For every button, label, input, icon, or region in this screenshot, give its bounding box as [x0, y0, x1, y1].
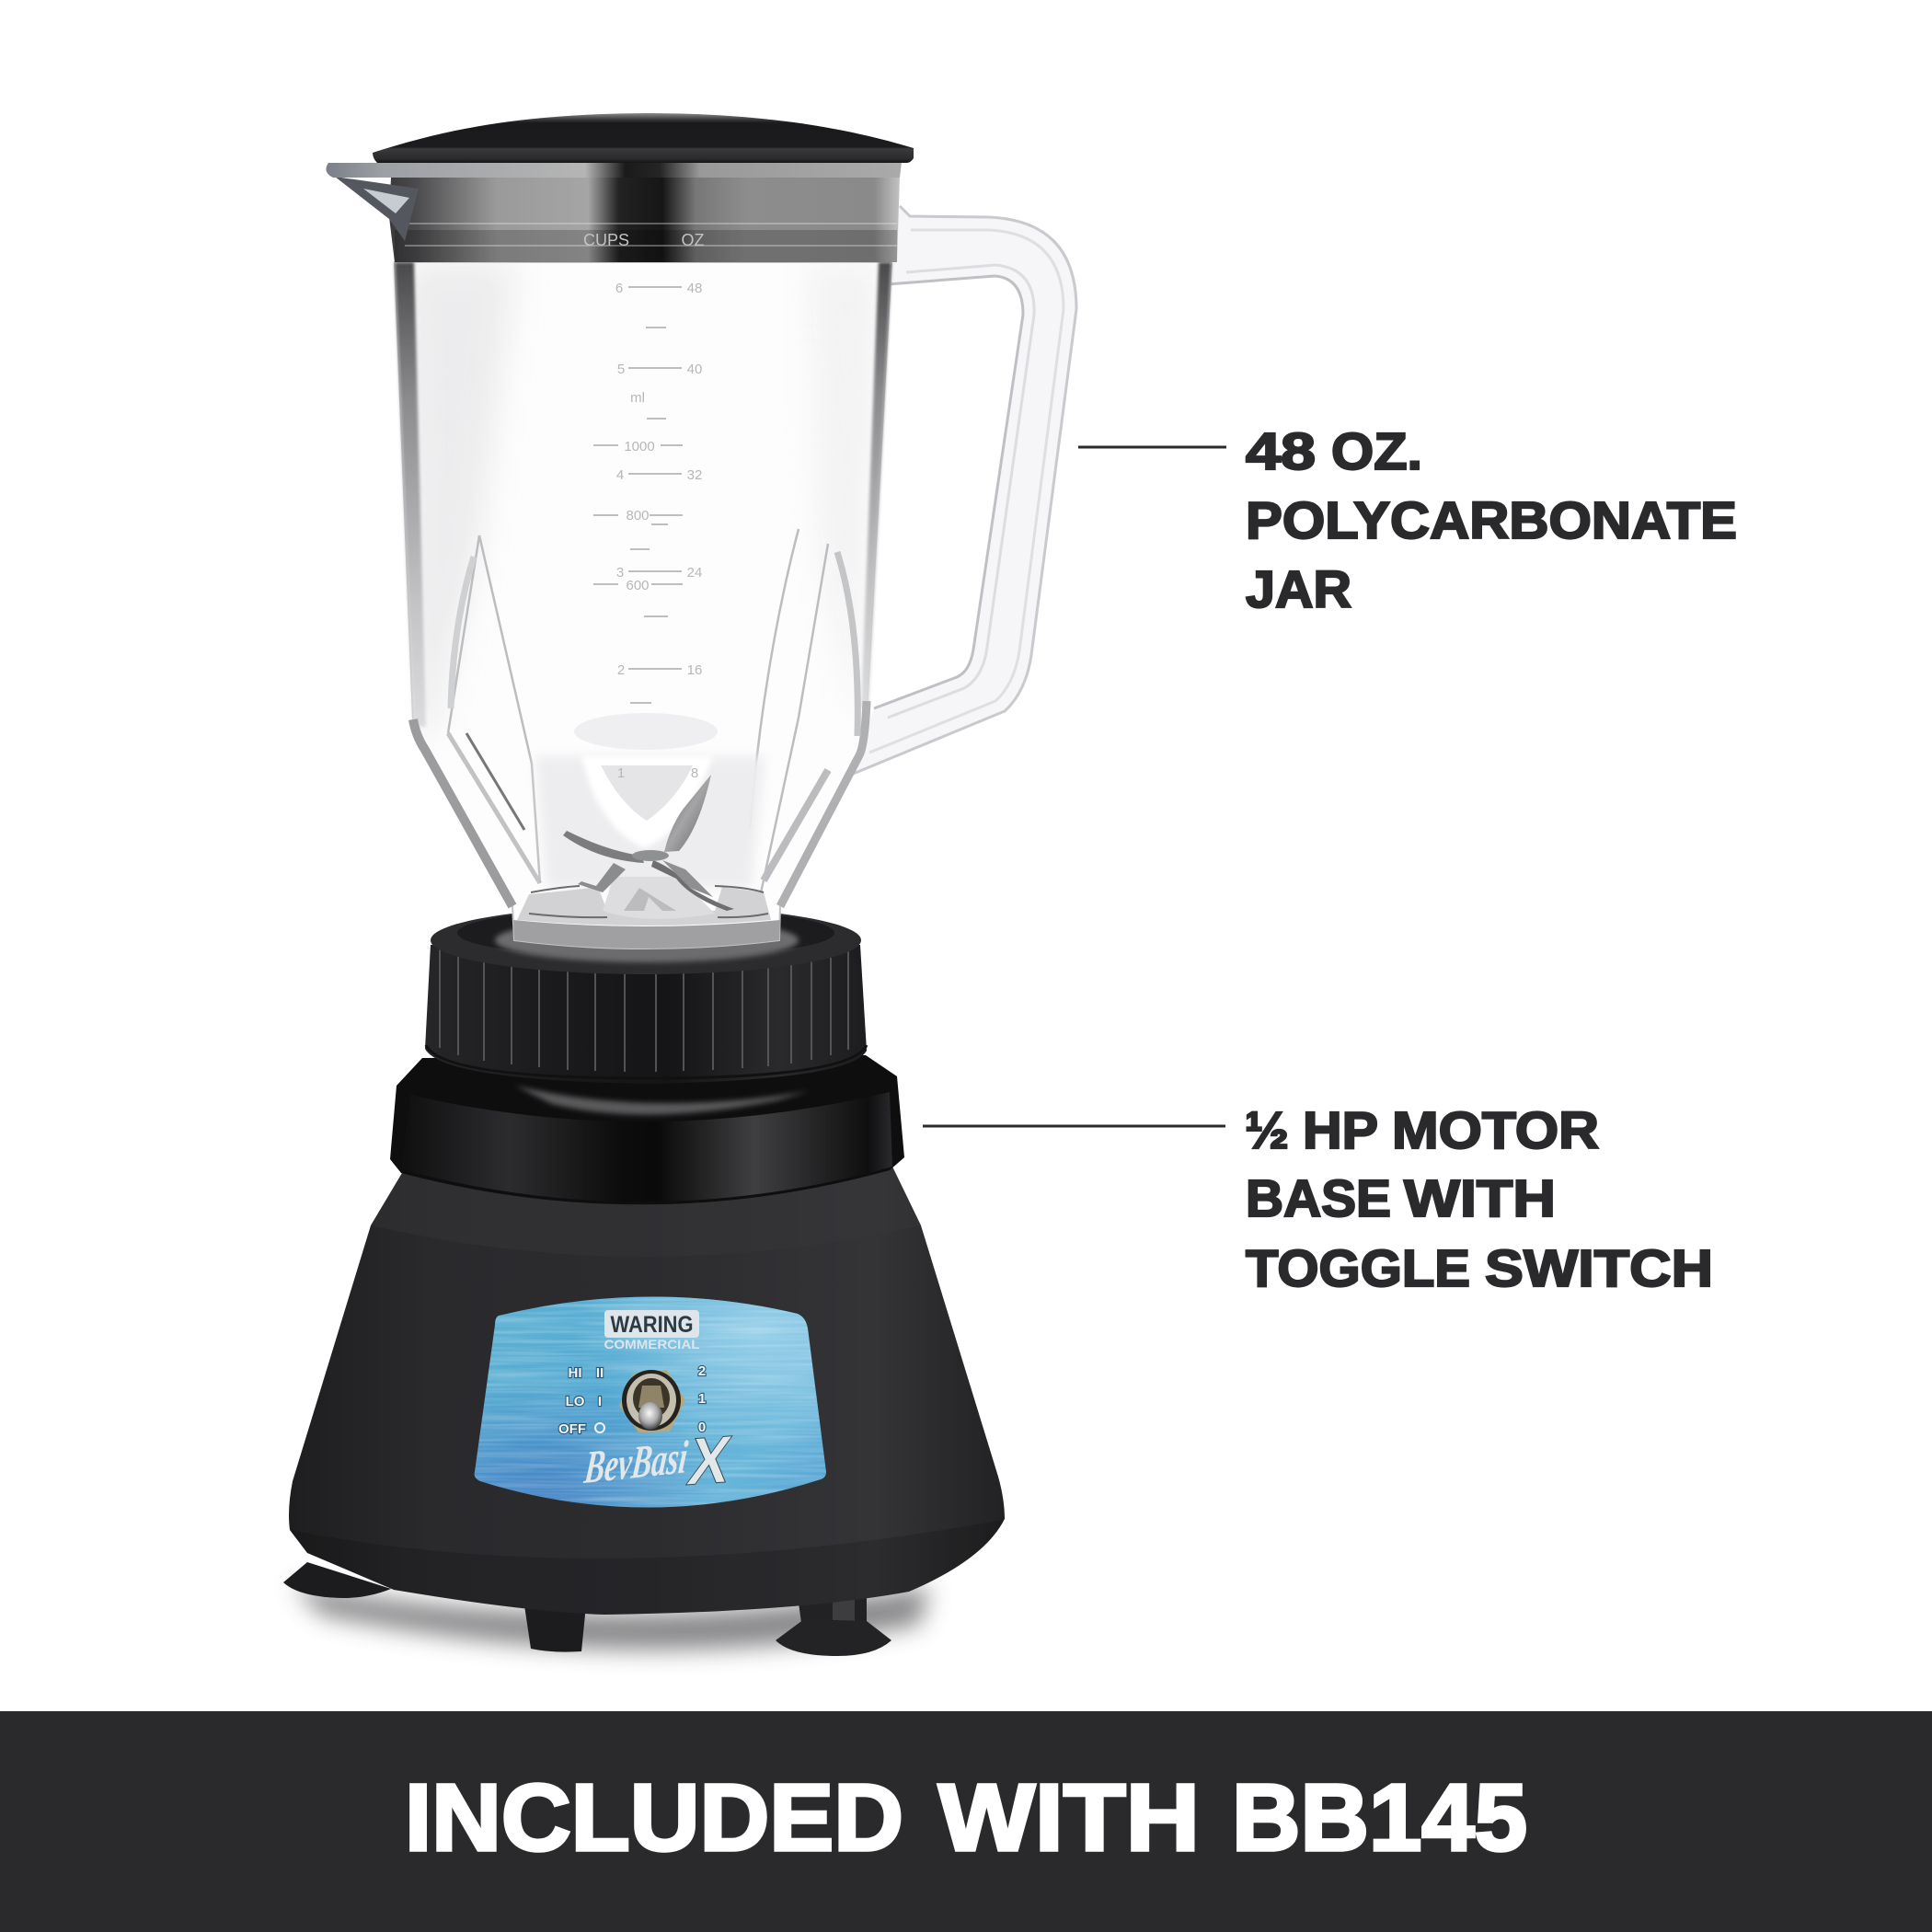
label: half HP motor base with toggle switch: WITH: [1404, 1169, 1556, 1228]
measurement scale: 24: [687, 565, 702, 581]
toggle switch: [619, 1370, 685, 1432]
measurement scale: [583, 231, 705, 772]
label: half HP motor base with toggle switch: BASE: [1246, 1169, 1391, 1228]
motor base: [289, 1167, 1005, 1615]
lower jar interior: 1: [617, 765, 625, 781]
Waring Commercial logo: WARING: [611, 1312, 694, 1338]
speed labels: OFF: [558, 1421, 586, 1437]
callout: jar: [1078, 422, 1737, 619]
measurement scale: 1000: [624, 439, 655, 454]
label: half HP motor base with toggle switch: ½: [1245, 1101, 1289, 1160]
jar spout and rim: [326, 162, 902, 241]
label: half HP motor base with toggle switch: HP: [1303, 1101, 1378, 1160]
measurement scale: 16: [687, 662, 702, 678]
speed labels: [558, 1363, 706, 1437]
blender jar: [326, 113, 1076, 949]
label: half HP motor base with toggle switch: TOGGLE: [1246, 1239, 1470, 1298]
measurement scale: 2: [617, 662, 625, 678]
speed labels: 2: [698, 1363, 706, 1379]
banner heading: INCLUDED: [405, 1765, 903, 1870]
soft interior shading: [405, 262, 883, 736]
measurement scale: 800: [626, 508, 650, 523]
measurement scale: 48: [687, 281, 702, 296]
measurement scale: OZ: [681, 231, 705, 249]
callout: motor base: [923, 1101, 1713, 1298]
Waring Commercial logo: [604, 1310, 700, 1351]
BevBasiX logo: BevBasi: [581, 1431, 690, 1493]
jar body: [395, 262, 891, 949]
lower jar interior: [513, 713, 780, 949]
threaded collar: [425, 906, 867, 1084]
leader line: motor: [923, 1124, 1225, 1128]
speed labels: HI: [569, 1365, 581, 1381]
measurement scale: 40: [687, 362, 702, 377]
label background: [475, 1297, 826, 1507]
label: 48 oz polycarbonate jar: JAR: [1246, 560, 1351, 619]
speed labels: LO: [566, 1394, 585, 1409]
speed labels: II: [596, 1365, 604, 1381]
blade assembly: [563, 775, 734, 919]
measurement scale: 600: [626, 578, 650, 593]
label: half HP motor base with toggle switch: [1245, 1101, 1713, 1298]
lower jar interior: 8: [691, 765, 698, 781]
blender product illustration: [283, 113, 1076, 1656]
banner heading: BB145: [1232, 1765, 1527, 1870]
leader line: jar: [1078, 445, 1226, 449]
jar lid: [373, 113, 914, 163]
label: 48 oz polycarbonate jar: POLYCARBONATE: [1246, 491, 1737, 550]
BevBasiX logo: X: [683, 1422, 737, 1500]
measurement scale: 6: [615, 281, 623, 296]
jar edge shading: [395, 262, 891, 727]
banner heading: WITH: [938, 1765, 1200, 1870]
Waring Commercial logo: COMMERCIAL: [604, 1337, 700, 1351]
label: half HP motor base with toggle switch: MOTOR: [1392, 1101, 1599, 1160]
control panel label: [475, 1297, 826, 1507]
speed labels: 1: [698, 1391, 706, 1407]
label: 48 oz polycarbonate jar: OZ.: [1331, 422, 1422, 481]
ground shadow: [293, 1584, 929, 1650]
measurement scale: 32: [687, 467, 702, 483]
dark upper band: [389, 175, 900, 262]
measurement scale: ml: [630, 390, 645, 406]
speed labels: I: [598, 1394, 602, 1409]
shoulder band: [390, 1055, 904, 1204]
blender feet: [283, 1562, 891, 1656]
jar internal ribs: [448, 529, 857, 897]
label: 48 oz polycarbonate jar: 48: [1246, 422, 1316, 481]
banner heading: [405, 1765, 1527, 1870]
measurement scale: 4: [616, 467, 624, 483]
footer banner: [0, 1711, 1932, 1932]
measurement scale: CUPS: [583, 231, 629, 249]
speed labels: 0: [698, 1420, 706, 1435]
lower jar facets: [413, 701, 867, 906]
jar handle: [851, 206, 1076, 775]
measurement scale: 5: [617, 362, 625, 377]
label: 48 oz polycarbonate jar: [1246, 422, 1737, 619]
label: half HP motor base with toggle switch: SWITCH: [1485, 1239, 1713, 1298]
measurement scale: 3: [616, 565, 624, 581]
